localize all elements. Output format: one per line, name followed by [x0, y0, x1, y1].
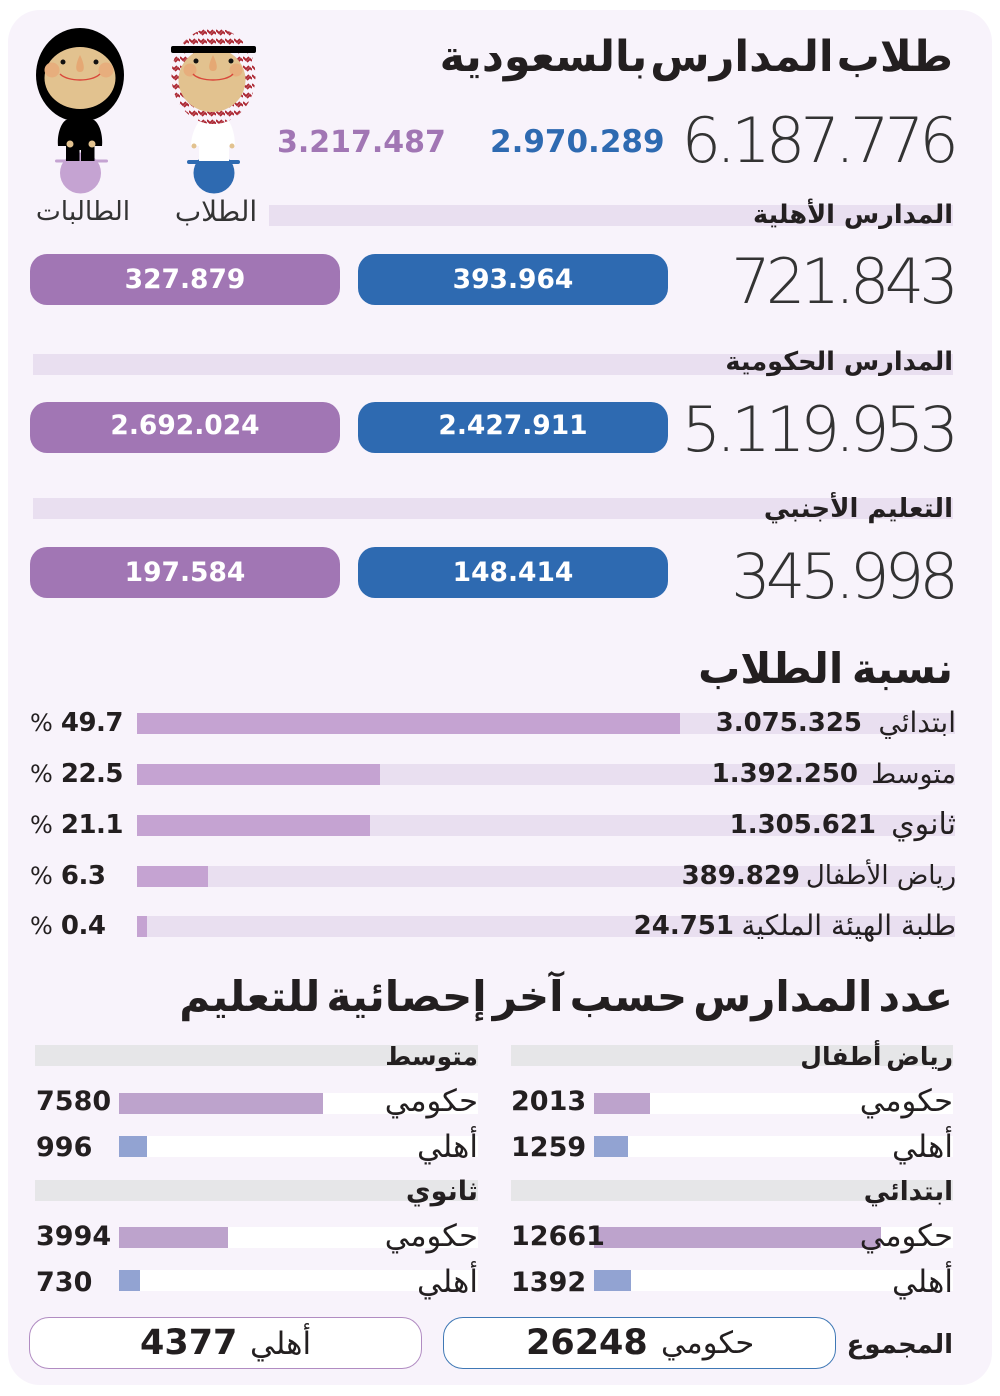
- total private pill: أهلي: [250, 1326, 311, 1362]
- share row: intermediate: متوسط: [871, 759, 956, 790]
- group: intermediate schools: متوسط: [385, 1042, 478, 1071]
- group: intermediate schools: 7580: [36, 1086, 111, 1117]
- foreign education female: [30, 547, 340, 598]
- private schools female: 327.879: [125, 264, 245, 295]
- group: secondary schools: ثانوي: [406, 1176, 478, 1207]
- private schools total: 721.843: [731, 245, 954, 318]
- main title: طلاب المدارس بالسعودية: [440, 32, 953, 82]
- share row: secondary: ثانوي: [891, 807, 956, 842]
- government schools heading: المدارس الحكومية: [725, 347, 953, 377]
- share row: primary: 3.075.325: [716, 708, 862, 738]
- icon: female student: [36, 28, 124, 194]
- private schools male: [358, 254, 668, 305]
- group: primary schools: أهلي: [892, 1264, 953, 1300]
- share row: secondary: 1.305.621: [730, 810, 876, 840]
- share row: secondary: [30, 807, 956, 842]
- share row: intermediate: 1.392.250: [712, 759, 858, 789]
- group: kindergarten schools: أهلي: [892, 1129, 953, 1165]
- foreign education total: 345.998: [731, 540, 954, 613]
- share row: royal commission: % 0.4: [30, 911, 105, 941]
- group: intermediate schools: أهلي: [417, 1129, 478, 1165]
- group: secondary schools: حكومي: [385, 1219, 478, 1254]
- share row: royal commission: 24.751: [634, 911, 734, 941]
- share row: kindergarten: رياض الأطفال: [806, 861, 956, 891]
- share row: kindergarten: [30, 859, 956, 891]
- foreign education female: 197.584: [125, 557, 245, 588]
- label: female students: الطالبات: [36, 196, 130, 227]
- total government pill: [443, 1317, 836, 1369]
- group: primary schools: حكومي: [860, 1219, 953, 1254]
- government schools total: 5.119.953: [682, 393, 954, 466]
- total private pill: 4377: [140, 1323, 237, 1363]
- foreign education bar: [33, 498, 953, 519]
- total male: 2.970.289: [490, 124, 665, 160]
- group: secondary schools: 730: [36, 1267, 92, 1298]
- group: kindergarten schools: حكومي: [860, 1084, 953, 1119]
- share row: secondary: % 21.1: [30, 810, 123, 840]
- schools count heading: عدد المدارس حسب آخر إحصائية للتعليم: [179, 972, 953, 1021]
- foreign education male: [358, 547, 668, 598]
- share row: primary: ابتدائي: [878, 706, 956, 739]
- government schools male: 2.427.911: [438, 410, 588, 441]
- group: primary schools: 1392: [511, 1267, 586, 1298]
- private schools male: 393.964: [453, 264, 573, 295]
- icon: male student: [171, 29, 256, 194]
- group: secondary schools: [35, 1176, 478, 1300]
- share row: intermediate: % 22.5: [30, 759, 123, 789]
- group: intermediate schools: 996: [36, 1132, 92, 1163]
- group: secondary schools: 3994: [36, 1221, 111, 1252]
- government schools female: 2.692.024: [110, 410, 260, 441]
- share row: primary: % 49.7: [30, 708, 123, 738]
- government schools bar: [33, 354, 953, 375]
- group: intermediate schools: حكومي: [385, 1084, 478, 1119]
- total private pill: [29, 1317, 422, 1369]
- government schools female: [30, 402, 340, 453]
- group: kindergarten schools: 2013: [511, 1086, 586, 1117]
- total government pill: حكومي: [661, 1326, 754, 1361]
- foreign education heading: التعليم الأجنبي: [764, 494, 953, 524]
- total students: 6.187.776: [682, 104, 954, 177]
- group: primary schools: [511, 1177, 953, 1300]
- government schools male: [358, 402, 668, 453]
- total label: المجموع: [847, 1330, 953, 1360]
- private schools heading: المدارس الأهلية: [753, 200, 953, 230]
- foreign education male: 148.414: [453, 557, 573, 588]
- group: primary schools: ابتدائي: [864, 1177, 953, 1207]
- share row: kindergarten: % 6.3: [30, 861, 105, 891]
- group: intermediate schools: [35, 1042, 478, 1165]
- share row: kindergarten: 389.829: [682, 861, 800, 891]
- group: kindergarten schools: 1259: [511, 1132, 586, 1163]
- group: secondary schools: أهلي: [417, 1264, 478, 1300]
- student share heading: نسبة الطلاب: [698, 644, 953, 693]
- group: kindergarten schools: رياض أطفال: [800, 1042, 953, 1071]
- group: primary schools: 12661: [511, 1221, 605, 1252]
- share row: royal commission: [30, 909, 956, 942]
- private schools female: [30, 254, 340, 305]
- share row: primary: [30, 706, 956, 739]
- label: male students: الطلاب: [175, 195, 257, 228]
- share row: royal commission: طلبة الهيئة الملكية: [741, 909, 956, 942]
- total government pill: 26248: [526, 1323, 648, 1363]
- private schools bar: [269, 205, 953, 226]
- total female: 3.217.487: [277, 125, 446, 160]
- share row: intermediate: [30, 759, 956, 790]
- group: kindergarten schools: [511, 1040, 953, 1165]
